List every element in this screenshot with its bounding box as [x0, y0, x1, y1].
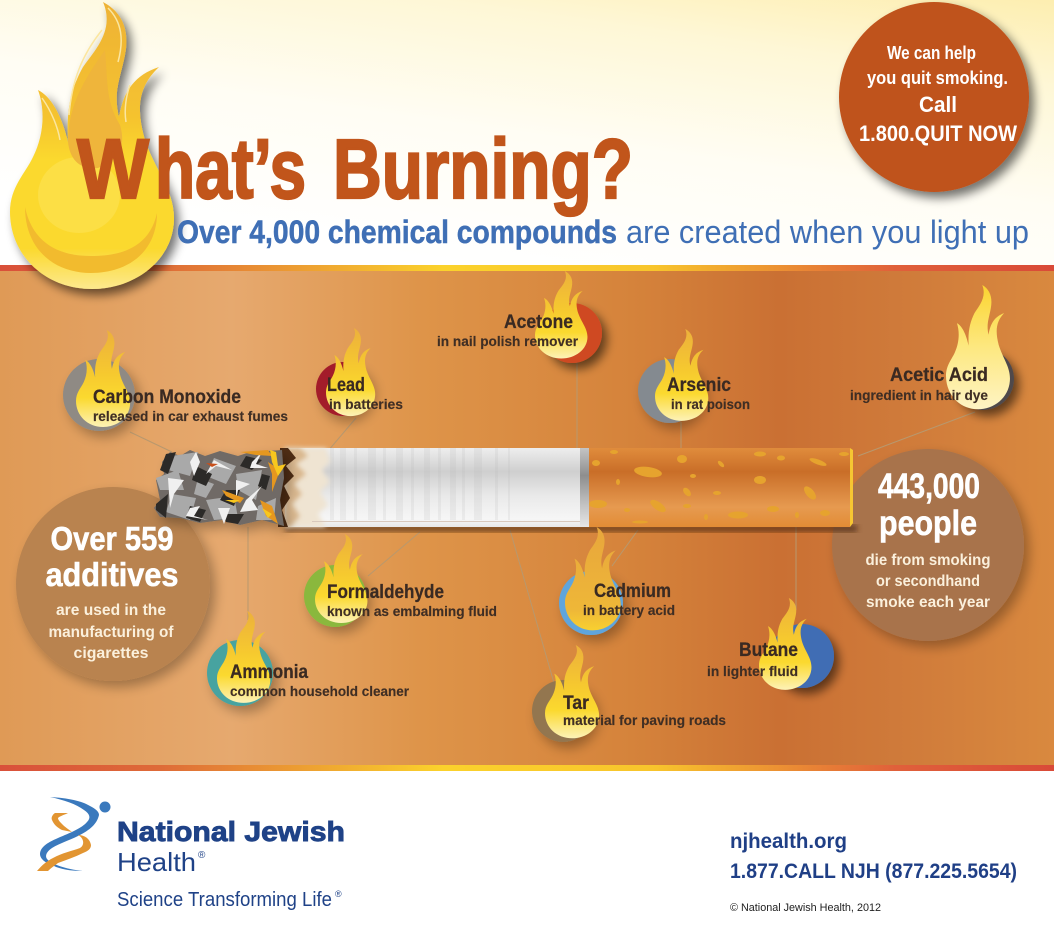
icon: helix: [37, 797, 110, 871]
stat: over 559 additives: [46, 520, 178, 662]
subtitle: are created when you light up: [626, 214, 1029, 250]
stat: 443,000 people: or secondhand: [876, 573, 980, 590]
label: lead: Lead: [327, 375, 365, 396]
top divider stripe: [0, 265, 1054, 271]
stat: over 559 additives: Over 559: [50, 520, 174, 557]
stat: over 559 additives: cigarettes: [74, 645, 148, 662]
label: acetone: [437, 312, 579, 349]
stat: 443,000 people: people: [879, 504, 977, 543]
callout text: We can help: [887, 43, 976, 63]
bottom divider stripe: [0, 765, 1054, 771]
label: butane: Butane: [739, 640, 798, 661]
label: arsenic: [667, 375, 750, 412]
cigarette paper: [278, 448, 581, 527]
flame inner layers: [25, 8, 157, 273]
logo: National Jewish Health: ®: [198, 850, 206, 861]
callout text: [859, 43, 1017, 146]
burnt paper edge: [278, 448, 330, 527]
silver filter band: [580, 448, 589, 527]
chemical: tar: [532, 645, 726, 742]
chemical: arsenic: [638, 329, 750, 423]
stat: over 559 additives: additives: [46, 556, 178, 593]
label: tar: Tar: [563, 693, 590, 714]
circle: over 559 additives: [16, 487, 210, 681]
cigarette: [154, 448, 857, 532]
stat: over 559 additives: manufacturing of: [48, 624, 174, 641]
label: butane: in lighter fluid: [707, 663, 798, 679]
copyright: © National Jewish Health, 2012: [730, 902, 881, 914]
filter tip: [589, 448, 853, 527]
label: acetone: in nail polish remover: [437, 333, 579, 349]
label: lead: in batteries: [329, 396, 403, 412]
label: acetic acid: [850, 365, 988, 403]
circle: 443,000 people: [832, 449, 1024, 641]
title: Burning?: [333, 122, 633, 216]
contact details: 1.877.CALL NJH (877.225.5654): [730, 860, 1017, 883]
chemical: lead: [316, 328, 403, 416]
contact details: [730, 830, 1017, 883]
stat: 443,000 people: [866, 467, 990, 611]
label: tar: material for paving roads: [563, 712, 726, 728]
chemical: formaldehyde: [304, 534, 497, 627]
label: carbon monoxide: Carbon Monoxide: [93, 387, 241, 408]
label: acetone: Acetone: [504, 312, 573, 333]
label: butane: [707, 640, 798, 679]
label: tar: [563, 693, 726, 728]
subtitle: Over 4,000 chemical compounds: [177, 214, 617, 250]
label: ammonia: Ammonia: [230, 662, 308, 683]
flame: main title flame: [10, 2, 174, 289]
chemical: cadmium: [559, 527, 675, 635]
callout text: 1.800.QUIT NOW: [859, 121, 1017, 146]
label: formaldehyde: Formaldehyde: [327, 582, 444, 603]
label: arsenic: Arsenic: [667, 375, 731, 396]
label: formaldehyde: [327, 582, 497, 619]
stat: 443,000 people: 443,000: [878, 467, 980, 506]
callout text: you quit smoking.: [867, 68, 1008, 88]
contact details: njhealth.org: [730, 830, 847, 853]
label: ammonia: [230, 662, 410, 699]
title: hat’s: [155, 122, 306, 216]
label: carbon monoxide: released in car exhaust fumes: [93, 408, 288, 424]
chemical: carbon monoxide: [63, 330, 288, 431]
label: cadmium: [583, 581, 675, 618]
label: lead: [327, 375, 403, 412]
callout text: Call: [919, 92, 957, 117]
header background: [0, 0, 1054, 266]
logo: National Jewish Health: ®: [335, 889, 342, 899]
burnt ash tip: [154, 450, 286, 526]
chemical: ammonia: [207, 611, 410, 706]
logo: National Jewish Health: National Jewish: [117, 816, 345, 847]
stat: over 559 additives: are used in the: [56, 602, 166, 619]
title: W: [77, 122, 150, 216]
cigarette shadow: [285, 525, 857, 532]
label: acetic acid: ingredient in hair dye: [850, 387, 988, 403]
callout: quit smoking circle: [839, 2, 1029, 192]
chemical: acetic acid: [850, 285, 1014, 410]
title: [77, 122, 633, 216]
label: cadmium: Cadmium: [594, 581, 671, 602]
label: formaldehyde: known as embalming fluid: [327, 603, 497, 619]
chemical: butane: [707, 598, 834, 690]
label: arsenic: in rat poison: [671, 396, 750, 412]
chemical: acetone: [437, 271, 602, 363]
logo: National Jewish Health: Science Transforming Life: [117, 889, 332, 911]
orange main panel: [0, 270, 1054, 766]
stat: 443,000 people: smoke each year: [866, 594, 990, 611]
subtitle: [177, 214, 1029, 250]
label: ammonia: common household cleaner: [230, 683, 410, 699]
logo: National Jewish Health: [37, 797, 345, 911]
leader lines: [130, 360, 975, 690]
logo: National Jewish Health: Health: [117, 847, 196, 877]
stat: 443,000 people: die from smoking: [866, 552, 990, 569]
label: acetic acid: Acetic Acid: [890, 365, 988, 386]
label: carbon monoxide: [93, 387, 288, 424]
label: cadmium: in battery acid: [583, 602, 675, 618]
